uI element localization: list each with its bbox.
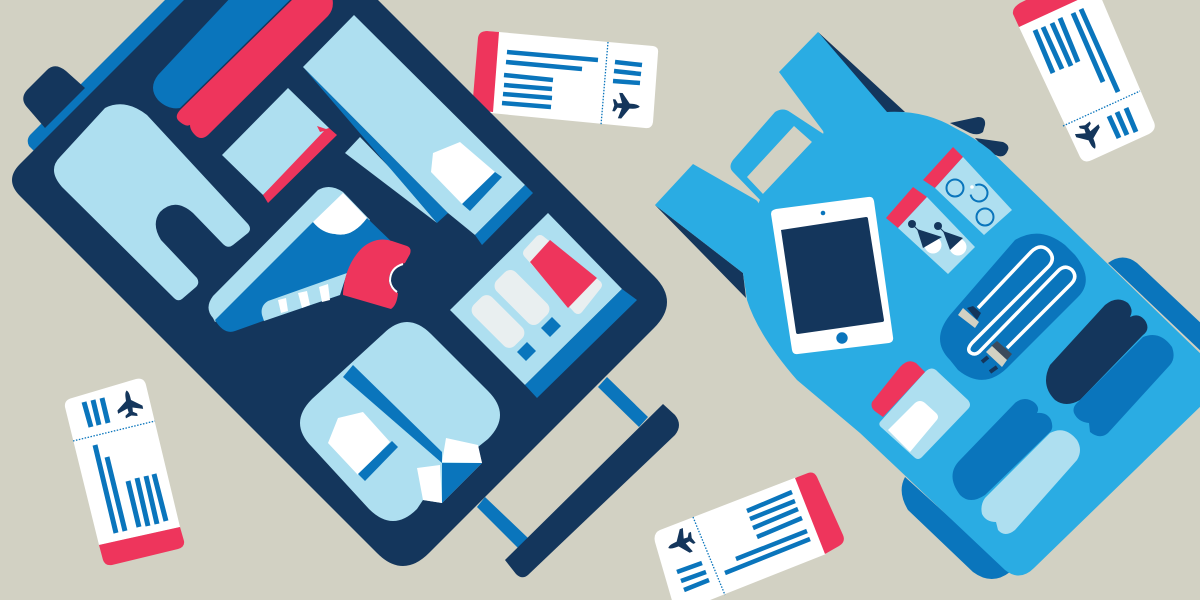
jar bbox=[872, 361, 970, 459]
lower packing pocket bbox=[300, 322, 500, 521]
rolled clothes navy bbox=[1046, 299, 1147, 404]
suitcase body bbox=[12, 0, 667, 566]
rolled clothes blue right bbox=[1074, 335, 1174, 436]
tablet bbox=[771, 197, 893, 354]
red rolled clothes bbox=[177, 0, 333, 138]
backpack side pockets bbox=[902, 258, 1200, 579]
sneaker bbox=[208, 187, 411, 332]
folded shirt bbox=[54, 104, 250, 300]
blue rolled clothes bbox=[153, 0, 295, 108]
boarding pass: bottom centre bbox=[655, 472, 844, 600]
suitcase side strip bbox=[28, 0, 195, 153]
backpack body bbox=[655, 32, 1200, 576]
packing pocket top bbox=[303, 15, 533, 245]
icon: plane bbox=[663, 526, 698, 560]
suitcase carry handle bbox=[23, 66, 85, 128]
telescopic handle rails bbox=[477, 377, 648, 548]
backpack strap shadows bbox=[655, 32, 905, 298]
zip pouch bbox=[222, 88, 337, 203]
rolled clothes blue left bbox=[952, 399, 1052, 500]
boarding pass: bottom left bbox=[65, 379, 184, 565]
backpack handle loop bbox=[730, 110, 825, 205]
boarding pass: top centre bbox=[472, 31, 658, 128]
icon: plane bbox=[612, 93, 640, 119]
backpack bbox=[655, 32, 1200, 579]
telescopic handle grip bbox=[505, 404, 679, 577]
boarding pass: top right bbox=[1013, 0, 1155, 161]
suitcase bbox=[12, 0, 679, 577]
toiletries pouch bbox=[450, 213, 637, 398]
rolled clothes light bbox=[981, 430, 1080, 534]
loose straps bbox=[950, 117, 1030, 238]
icon: plane bbox=[114, 388, 144, 420]
icon: plane bbox=[1073, 119, 1107, 154]
ring card bbox=[923, 147, 1012, 235]
white tag bbox=[431, 142, 495, 205]
earring card bbox=[886, 187, 975, 274]
cable pouch bbox=[940, 234, 1086, 380]
